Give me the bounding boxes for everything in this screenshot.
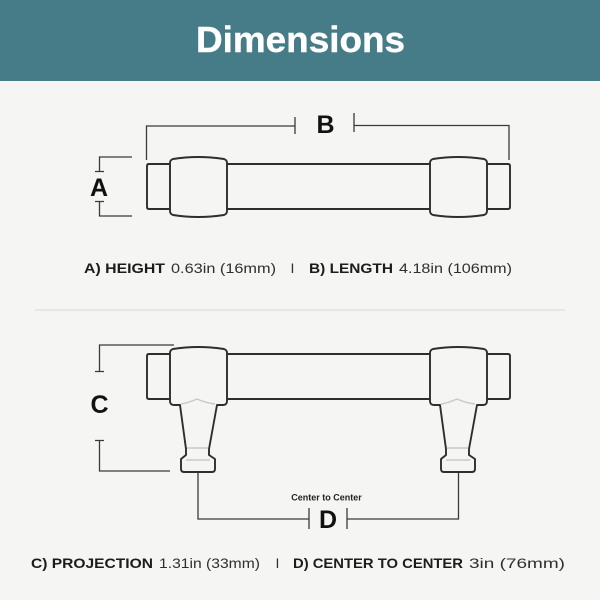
- caption: projection and center to center: 1.31in (33mm): [159, 555, 260, 571]
- caption: height and length: A) HEIGHT: [84, 260, 165, 276]
- caption: height and length: 4.18in (106mm): [399, 260, 512, 276]
- left post: [170, 347, 227, 472]
- caption: projection and center to center: [31, 555, 565, 571]
- caption: height and length: 0.63in (16mm): [171, 260, 276, 276]
- caption: projection and center to center: C) PROJECTION: [31, 555, 153, 571]
- caption: projection and center to center: I: [276, 555, 279, 571]
- dimension C: C: [90, 391, 109, 419]
- caption: projection and center to center: 3in (76mm): [469, 555, 565, 571]
- dimension C: [90, 345, 174, 471]
- left knob: [170, 157, 227, 217]
- top view handle diagram: [147, 157, 510, 217]
- side view handle diagram: [147, 347, 510, 472]
- center to center label: Center to Center: [291, 492, 362, 502]
- caption: height and length: [84, 260, 512, 276]
- dimension B: [146, 111, 509, 160]
- title: Dimensions: [196, 19, 405, 60]
- dimension B: B: [316, 111, 335, 139]
- dimension A: [90, 157, 132, 216]
- right post: [430, 347, 487, 472]
- caption: height and length: I: [290, 260, 294, 276]
- handle bar: [147, 164, 510, 209]
- caption: height and length: B) LENGTH: [309, 260, 393, 276]
- caption: projection and center to center: D) CENTER TO CENTER: [293, 555, 463, 571]
- right knob: [430, 157, 487, 217]
- dimension D: D: [319, 506, 337, 534]
- dimension D: [198, 473, 458, 534]
- header banner: [0, 0, 600, 81]
- handle bar: [147, 354, 510, 399]
- dimension A: A: [90, 174, 108, 202]
